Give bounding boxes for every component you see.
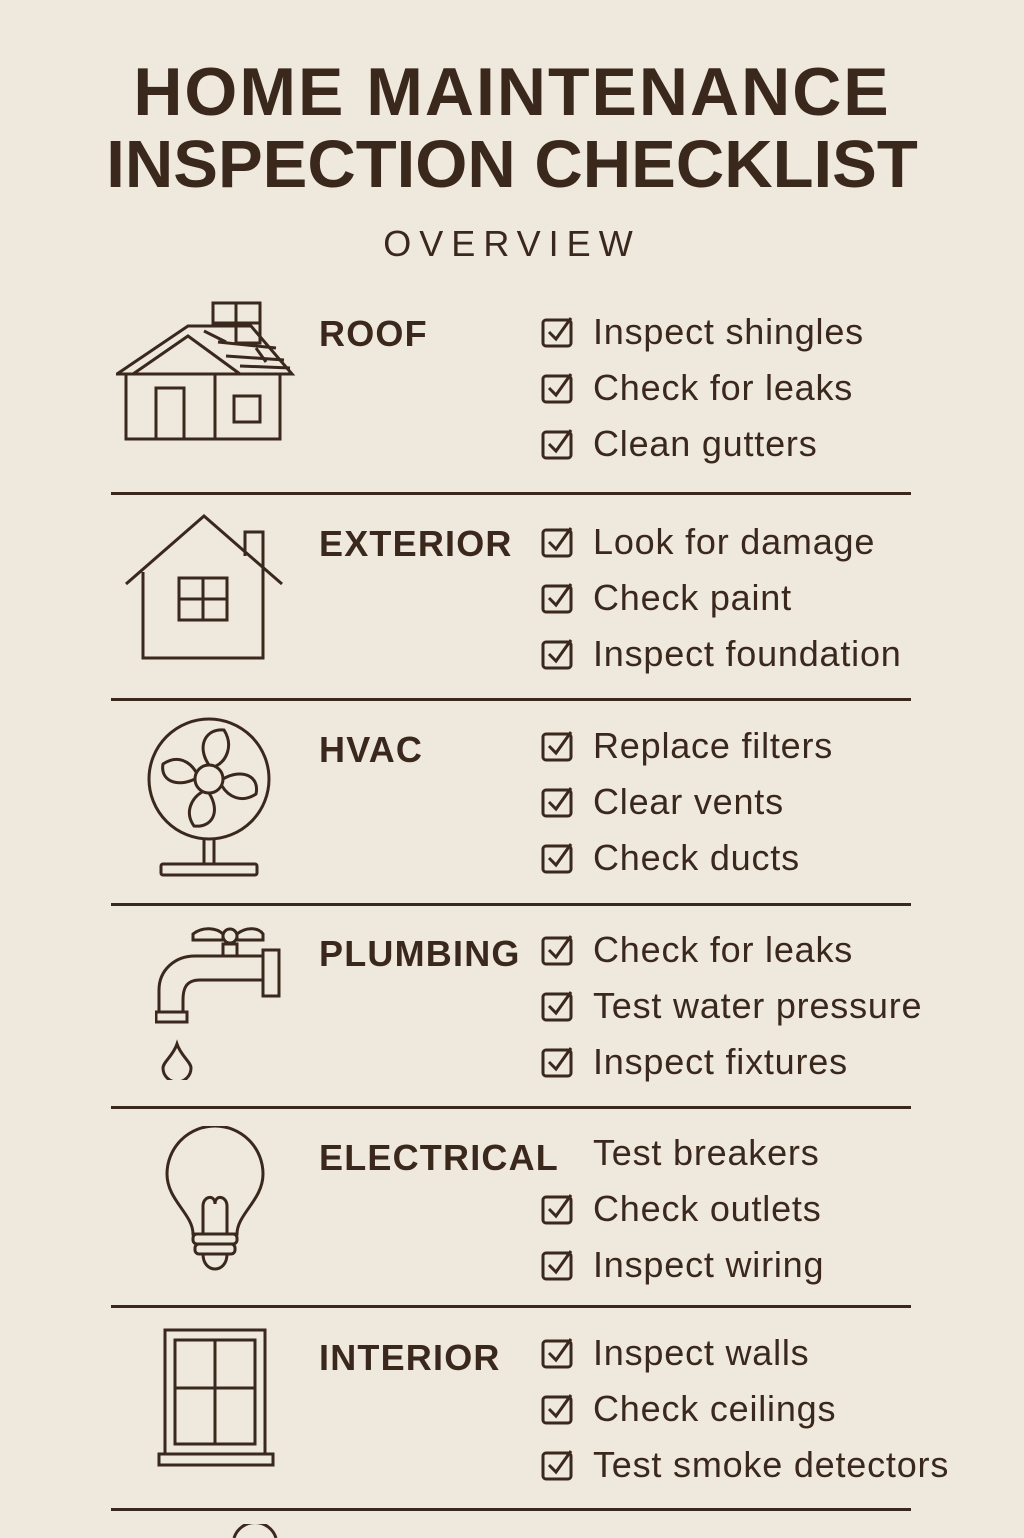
row: roof: [116, 302, 864, 464]
icon: partial next row: [232, 1524, 278, 1538]
checklist: electrical: Test breakers: [593, 1132, 820, 1173]
checklist: interior: Check ceilings: [593, 1388, 836, 1429]
icon: light bulb: [166, 1126, 264, 1270]
row: interior: [158, 1328, 949, 1485]
checklist: interior: Inspect walls: [593, 1332, 810, 1373]
category: roof: ROOF: [319, 313, 428, 354]
icon: window: [158, 1328, 274, 1466]
checklist: hvac: Replace filters: [593, 725, 833, 766]
category: interior: INTERIOR: [319, 1337, 501, 1378]
checklist: exterior: Check paint: [593, 577, 792, 618]
checklist: plumbing: Test water pressure: [593, 985, 922, 1026]
checklist: roof: Inspect shingles: [593, 311, 864, 352]
icon: fan: [148, 718, 270, 876]
checklist: roof: Check for leaks: [593, 367, 853, 408]
checklist: electrical: [542, 1132, 824, 1285]
checklist: roof: Clean gutters: [593, 423, 818, 464]
title: [106, 54, 918, 202]
checklist: electrical: Check outlets: [593, 1188, 822, 1229]
category: plumbing: PLUMBING: [319, 933, 521, 974]
icon: exterior house: [125, 514, 283, 660]
title: INSPECTION CHECKLIST: [106, 127, 918, 202]
checklist: exterior: [542, 521, 902, 674]
checklist: interior: Test smoke detectors: [593, 1444, 949, 1485]
checklist: roof: [542, 311, 864, 464]
checklist: exterior: Inspect foundation: [593, 633, 902, 674]
subtitle: OVERVIEW: [383, 223, 641, 264]
icon: faucet: [155, 927, 280, 1080]
row: plumbing: [155, 927, 922, 1082]
category: electrical: ELECTRICAL: [319, 1137, 559, 1178]
checklist: hvac: [542, 725, 833, 878]
icon: roof house: [116, 302, 296, 440]
checklist: hvac: Check ducts: [593, 837, 800, 878]
title: HOME MAINTENANCE: [133, 54, 891, 130]
checklist: exterior: Look for damage: [593, 521, 875, 562]
row: electrical: [166, 1126, 824, 1285]
checklist: electrical: Inspect wiring: [593, 1244, 824, 1285]
checklist: interior: [542, 1332, 949, 1485]
row: hvac: [148, 718, 833, 878]
category: hvac: HVAC: [319, 729, 423, 770]
category: exterior: EXTERIOR: [319, 523, 513, 564]
row: exterior: [125, 514, 902, 674]
checklist: hvac: Clear vents: [593, 781, 784, 822]
checklist: plumbing: [542, 929, 922, 1082]
checklist: plumbing: Inspect fixtures: [593, 1041, 848, 1082]
checklist: plumbing: Check for leaks: [593, 929, 853, 970]
